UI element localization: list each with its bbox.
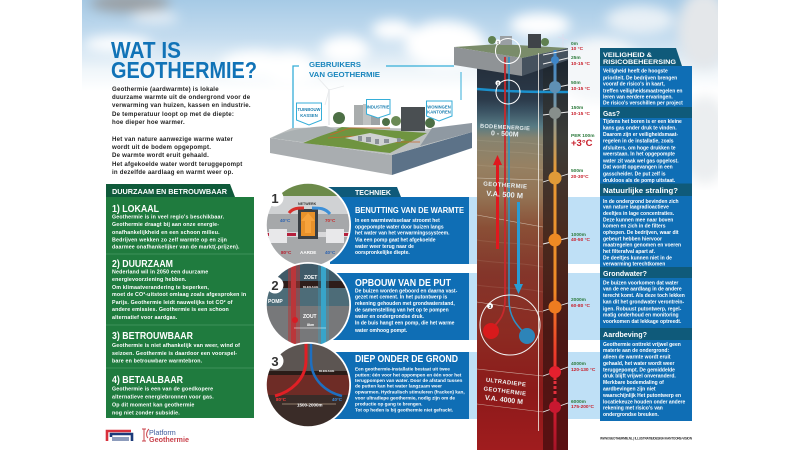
circle 2: well construction [265, 262, 351, 348]
depth and temperature labels: 0m [571, 41, 578, 47]
circle 3: deep underground [265, 342, 351, 428]
section: duurzaam: energievoorziening hebben. [112, 277, 187, 283]
intro text [111, 86, 251, 176]
technique card 1: opgepompte water door buizen langs [355, 225, 444, 231]
section: betaalbaar: nog niet zonder subsidie. [112, 410, 180, 416]
section: betrouwbaar [112, 331, 240, 364]
logo: EBN [107, 431, 132, 441]
rock streaks [477, 140, 543, 292]
technique card 3: DIEP ONDER DE GROND [355, 353, 458, 365]
shaft label: geothermie: V.A. 500 M [486, 189, 523, 200]
technique card 3: Tot op heden is bij geothermie niet gefrackt. [355, 407, 453, 412]
section: duurzaam: andere emissies. Geothermie is een schoon [112, 307, 229, 313]
technique card 3: Een geothermie-installatie bestaat uit twee [355, 366, 450, 371]
section: aardbeving: rekening met risico's van [603, 406, 663, 412]
circle 1: heat exchanger [266, 184, 351, 264]
section: grondwater: igen. Robuust putontwerp, regel- [603, 306, 682, 312]
footer credit: WWW.GEOTHERMIE.NL | ILLUSTRATIE/DESIGN KANTOORE-VISION [600, 436, 693, 440]
section: natuurlijke straling: deeltjes in lage concentraties. [603, 211, 675, 217]
intro text: Het afgekoelde water wordt teruggepompt [112, 161, 242, 168]
depth and temperature labels: 2000m [571, 297, 586, 303]
intro block: prioriteit. De bedrijven brengen [603, 75, 677, 81]
circle 3 marker [480, 295, 540, 355]
section: duurzaam: alternatief voor aardgas. [112, 315, 178, 321]
section: betaalbaar [112, 375, 214, 416]
section: gas: Gas? [603, 109, 620, 118]
section: duurzaam [112, 259, 246, 321]
technique card 1: BENUTTING VAN DE WARMTE [355, 206, 465, 215]
block sides [270, 138, 392, 175]
heading bracket: gebruikers van geothermie: GEBRUIKERS [309, 60, 361, 69]
pipes on surface [328, 128, 420, 142]
shaft label: bodemenergie: 0 - 500M [491, 130, 519, 139]
silos and factory [354, 104, 380, 125]
section: lokaal: Bedrijven wekken zo zelf warmte op en zijn [112, 237, 227, 243]
depth and temperature labels: 25m [571, 55, 581, 61]
technique card 2: water omhoog pompt. [354, 328, 408, 334]
circle 1: heat exchanger: 70°C [325, 218, 336, 223]
section: gas: regelen in de installatie, zoals [603, 138, 674, 144]
intro text: hoe dieper hoe warmer. [112, 119, 185, 126]
shaft label: geothermie [482, 181, 528, 201]
shaft label: bodemenergie: BODEMENERGIE [480, 124, 530, 132]
section: gas: Daarom zijn er veiligheidsmaat- [603, 132, 678, 138]
section: lokaal: daarmee onafhankelijker van de markt(-prijzen). [112, 245, 240, 251]
circle 2 marker [495, 80, 520, 104]
circle 3: deep underground: 1500-2000m [297, 402, 323, 408]
heading tab [106, 184, 235, 197]
technique card 3: opwarmen. Hydraulisch stimuleren (fracken) kan, [355, 390, 465, 395]
section: gas: Tijdens het boren is er een kleine [603, 119, 682, 125]
intro text: duurzame warmte uit de ondergrond voor de [112, 94, 251, 101]
circle 3 marker: 3 [489, 304, 492, 309]
section: lokaal: Geothermie draagt bij aan onze energie- [112, 222, 219, 228]
heading tab [600, 48, 682, 66]
intro text: De temperatuur loopt op met de diepte: [112, 111, 234, 118]
banner: woningen kantoren: WONINGEN [427, 104, 451, 110]
section: grondwater: terecht komt. Als deze toch lekken [603, 293, 685, 299]
technique card 1: het water van het verwarmingssysteem. [355, 231, 450, 237]
central pipe [491, 57, 505, 330]
section: betrouwbaar: 3) BETROUWBAAR [112, 331, 194, 342]
technique card 3: de putten kan het water langzaam weer [355, 384, 442, 389]
section: natuurlijke straling: gebeurt hebben hiervoor [603, 237, 662, 243]
section: natuurlijke straling: maatregelen genomen en voeren [603, 243, 681, 249]
section: grondwater: Grondwater? [603, 269, 647, 278]
technique card 1 [330, 197, 469, 264]
section: natuurlijke straling: In de ondergrond bevinden zich [603, 199, 679, 205]
circle 1: heat exchanger: 40°C [280, 218, 291, 223]
section: betaalbaar: Op dit moment kan geothermie [112, 402, 194, 408]
technique card 3: voor ultradiepe geothermie, nodig zijn om de [355, 395, 455, 400]
plant [345, 133, 405, 146]
tab: TECHNIEK [355, 188, 392, 197]
section: aardbeving: Merkbare bodemdaling of [603, 380, 664, 386]
depth and temperature labels: 10-15 °C [571, 86, 591, 92]
circle 2 marker: 2 [497, 82, 499, 86]
section: duurzaam: Nederland wil in 2050 een duurzame [112, 270, 208, 276]
depth and temperature labels: PER 100m [571, 133, 594, 139]
depth and temperature labels: 20-30°C [571, 174, 589, 180]
technique card 3: terugpompen van water. Door de afstand tussen [355, 378, 462, 383]
logo: platform geothermie: Platform [149, 428, 176, 437]
technique card 2: de samenstelling van het op te pompen [355, 307, 449, 313]
depth scale line [538, 53, 540, 431]
technique card 1: Via een pomp gaat het afgekoelde [355, 237, 436, 243]
trees [333, 112, 435, 128]
heading bracket: gebruikers van geothermie: VAN GEOTHERMIE [309, 70, 380, 79]
number badges: 3 [271, 354, 279, 369]
section: betaalbaar: Geothermie is een van de goedkopere [112, 386, 213, 392]
depth and temperature labels: +3°C [571, 138, 593, 149]
wind turbine [318, 78, 344, 125]
intro text: verwarming van huizen, kassen en industrie. [112, 102, 251, 109]
intro block: Veiligheid heeft de hoogste [603, 69, 668, 75]
depth and temperature labels: 10-15 °C [571, 61, 591, 67]
section: natuurlijke straling: Deze kunnen mee naar boven [603, 217, 673, 223]
section: gas: afsluiters, om hoge drukken te [603, 146, 676, 152]
section: gas: weerstaan. In het opgepompte [602, 152, 675, 158]
section: betaalbaar: 4) BETAALBAAR [112, 375, 184, 386]
intro text: De warmte wordt eruit gehaald. [112, 152, 209, 159]
banner: tuinbouw kassen: KASSEN [300, 113, 318, 118]
banner: woningen kantoren: KANTOREN [427, 110, 451, 114]
section: natuurlijke straling: Natuurlijke straling? [603, 186, 678, 195]
technique card 2: In de buis hangt een pomp, die het warme [355, 321, 455, 327]
heading tab: DUURZAAM EN BETROUWBAAR [112, 187, 228, 196]
panel: veiligheid en risicobeheersing [600, 48, 692, 421]
section: aardbeving: Aardbeving? [603, 330, 647, 339]
section: gas: kans gas onder druk te vinden. [603, 125, 677, 131]
technique card 2: OPBOUW VAN DE PUT [355, 277, 451, 289]
depth and temperature labels: 150m [571, 105, 583, 111]
number badges: 1 [271, 191, 279, 206]
geological shaft [454, 34, 596, 450]
logo: platform geothermie: Geothermie [149, 435, 189, 444]
banner: woningen kantoren [426, 101, 452, 121]
circle 2: well construction: ZOET [304, 275, 317, 281]
depth and temperature labels [571, 41, 596, 410]
light blue bands behind shaft [469, 197, 600, 419]
circle 1 marker: 1 [497, 40, 499, 44]
section: aardbeving: Geothermie onttrekt vrijwel geen [603, 342, 681, 348]
circle 1: heat exchanger: 40°C [325, 250, 336, 255]
section: aardbeving: gehaald, het water wordt weer [603, 361, 674, 367]
depth and temperature labels: 10-15 °C [571, 111, 591, 117]
depth and temperature labels: 60-80 °C [571, 303, 591, 309]
shaft label: ultradiepe geothermie: ULTRADIEPE [485, 378, 526, 389]
intro block: treffen veiligheidsmaatregelen en [603, 88, 682, 94]
logos [107, 428, 189, 444]
depth and temperature labels: 40-50 °C [571, 237, 591, 243]
panel: duurzaam en betrouwbaar [106, 184, 254, 418]
technique card 2: gezet met cement. In het putontwerp is [355, 295, 447, 301]
intro text: Het van nature aanwezige warme water [112, 136, 233, 143]
top block [454, 34, 568, 76]
section: aardbeving [600, 328, 692, 418]
heading bracket: gebruikers van geothermie [293, 60, 461, 128]
section: natuurlijke straling [600, 184, 692, 268]
section: aardbeving: teruggepompt. De gemiddelde [603, 367, 675, 373]
section: duurzaam: 2) DUURZAAM [112, 259, 173, 270]
section: aardbeving: aardbevingen zijn niet [603, 387, 656, 393]
intro block: leren van eerdere ervaringen. [603, 95, 673, 101]
section: betaalbaar: alternatieve energiebronnen voor gas. [112, 394, 214, 400]
section: aardbeving: druk blijft vrijwel onveranderd. [603, 374, 676, 380]
arrow: cold water down [514, 202, 523, 294]
intro block: vooraf de risico's in kaart, [603, 82, 665, 88]
section: lokaal: Geothermie is in veel regio's beschikbaar. [112, 215, 225, 221]
section: aardbeving: ondergrondse breuken. [603, 412, 659, 418]
number badges: 2 [271, 278, 279, 293]
section: natuurlijke straling: komen en zich in de filters [603, 224, 666, 230]
depth and temperature labels: 500m [571, 168, 583, 174]
technique card 2: rekening gehouden met grondwaterstand, [355, 301, 455, 307]
circle 1: heat exchanger: 80°C [281, 250, 292, 255]
circle 3: deep underground: KLEILAAG [319, 369, 335, 373]
intro text: Geothermie (aardwarmte) is lokale [112, 86, 219, 93]
intro text: in dezelfde aardlaag en warmt weer op. [112, 169, 234, 176]
title [111, 37, 257, 83]
shaft label: ultradiepe geothermie: GEOTHERMIE [483, 386, 527, 398]
section: betrouwbaar: seizoen. Geothermie is daardoor een voorspel- [112, 351, 237, 357]
depth and temperature labels: 1000m [571, 232, 586, 238]
logo: platform geothermie [142, 428, 189, 444]
section: gas: Dat wordt opgevangen in een [603, 165, 673, 171]
section: gas: gasscheider. De put zelf is [603, 171, 666, 177]
banner: tuinbouw kassen [296, 103, 322, 125]
tab [320, 187, 401, 197]
depth and temperature labels: 6000m [571, 399, 586, 405]
heading tab: RISICOBEHEERSING [603, 59, 676, 66]
intro block: De risico's verschillen per project [603, 101, 683, 107]
title: WAT IS [111, 37, 181, 63]
section: gas: water zit vaak wel gas opgelost. [602, 158, 679, 164]
technique card 2 [330, 273, 469, 340]
technique card 2: De buizen worden geboord en daarna vast- [355, 289, 458, 295]
section: grondwater: matig onderhoud en monitoring [603, 313, 679, 319]
intro text: wordt uit de bodem opgepompt. [111, 144, 211, 151]
section: gas [600, 107, 692, 184]
circle 3: deep underground: 80°C [276, 397, 287, 402]
section: betrouwbaar: bare en betrouwbare warmtebron. [112, 358, 203, 364]
circle 1 marker [495, 38, 520, 64]
section: duurzaam: Om klimaatverandering te beperken, [112, 285, 209, 291]
banner: industrie: INDUSTRIE [367, 104, 389, 110]
section: duurzaam: moet de CO²-uitstoot omlaag zoals afgesproken in [112, 292, 246, 298]
depth and temperature labels: 50m [571, 80, 581, 86]
section: natuurlijke straling: De deeltjes kunnen niet in de [603, 255, 672, 261]
section: aardbeving: materie aan de ondergrond: [603, 348, 669, 354]
section: duurzaam: Parijs. Geothermie leidt nauwelijks tot CO² of [112, 300, 233, 306]
aquifer [477, 89, 568, 92]
section: grondwater: kan dit het grondwater verontrein- [603, 300, 684, 306]
section: natuurlijke straling: van nature laagradioactieve [603, 205, 669, 211]
depth and temperature labels: 175-200°C [571, 404, 595, 410]
isometric block: users of geothermal [270, 78, 472, 175]
technique card 3: productie op gang te brengen. [355, 401, 422, 406]
depth lines [477, 178, 543, 412]
circle 2: well construction: KLEILAAG [303, 285, 319, 289]
section: aardbeving: locatiekeuze houden onder andere [603, 399, 685, 405]
technique card 3: putten: één voor het oppompen en één voor het [355, 372, 462, 377]
apartment tower [401, 107, 425, 131]
banner: tuinbouw kassen: TUINBOUW [297, 107, 321, 112]
section: gas: drukloos als de pomp uitstaat. [603, 178, 676, 184]
title: GEOTHERMIE? [111, 57, 257, 83]
section: aardbeving: alleen de warmte wordt eruit [603, 355, 671, 361]
circle 3: deep underground: 40°C [332, 397, 343, 402]
thermometer [543, 50, 568, 450]
technique card 1: In een warmtewisselaar stroomt het [355, 218, 440, 224]
technique card 2: water en ondergrondse druk. [354, 314, 425, 320]
panel: techniek [265, 182, 469, 428]
depth and temperature labels: 120-130 °C [571, 367, 596, 373]
banner: industrie [366, 100, 390, 118]
shaft label: geothermie: GEOTHERMIE [483, 181, 528, 191]
circle 2: well construction: ZOUT [303, 314, 317, 320]
technique card 1: water weer terug naar de [354, 244, 414, 250]
section: grondwater [600, 267, 692, 325]
heading tab: VEILIGHEID & [603, 52, 652, 59]
technique card 3 [330, 352, 469, 419]
section: lokaal [112, 204, 240, 251]
section: natuurlijke straling: ophopen. De bedrijven, waar dit [603, 230, 679, 236]
section: natuurlijke straling: het filterafval apart af. [603, 249, 656, 255]
circle 2: well construction: 8km [307, 323, 314, 327]
surface [270, 127, 472, 155]
sky background [82, 0, 731, 190]
depth and temperature labels: 4000m [571, 361, 586, 367]
circle 1: heat exchanger: AARDE [300, 250, 316, 255]
circle 2: well construction: POMP [268, 299, 283, 305]
shaft label: ultradiepe geothermie [482, 377, 528, 407]
section: grondwater: De buizen voorkomen dat water [603, 280, 678, 286]
intro block [603, 69, 683, 107]
number badges [266, 190, 284, 370]
section: lokaal: onafhankelijkheid en een schoon milieu. [112, 230, 220, 236]
shaft label: ultradiepe geothermie: V.A. 4000 M [484, 395, 523, 406]
section: grondwater: van de ene aardlaag in de andere [603, 287, 682, 293]
section: betrouwbaar: Geothermie is niet afhankelijk van weer, wind of [112, 343, 240, 349]
arrow: warm water up [493, 155, 502, 249]
section: lokaal: 1) LOKAAL [112, 204, 159, 215]
section: aardbeving: waarschijnlijk Het putontwerp en [602, 393, 681, 399]
section: grondwater: voorkomen dat lekkage optreedt. [603, 319, 682, 325]
section: natuurlijke straling: verwarming terechtkomen [603, 262, 665, 268]
technique card 1: oorspronkelijke diepte. [355, 250, 410, 256]
depth and temperature labels: 10 °C [571, 46, 584, 52]
shaft label: bodemenergie [480, 124, 530, 139]
circle 1: heat exchanger: NETWERK [298, 202, 317, 206]
